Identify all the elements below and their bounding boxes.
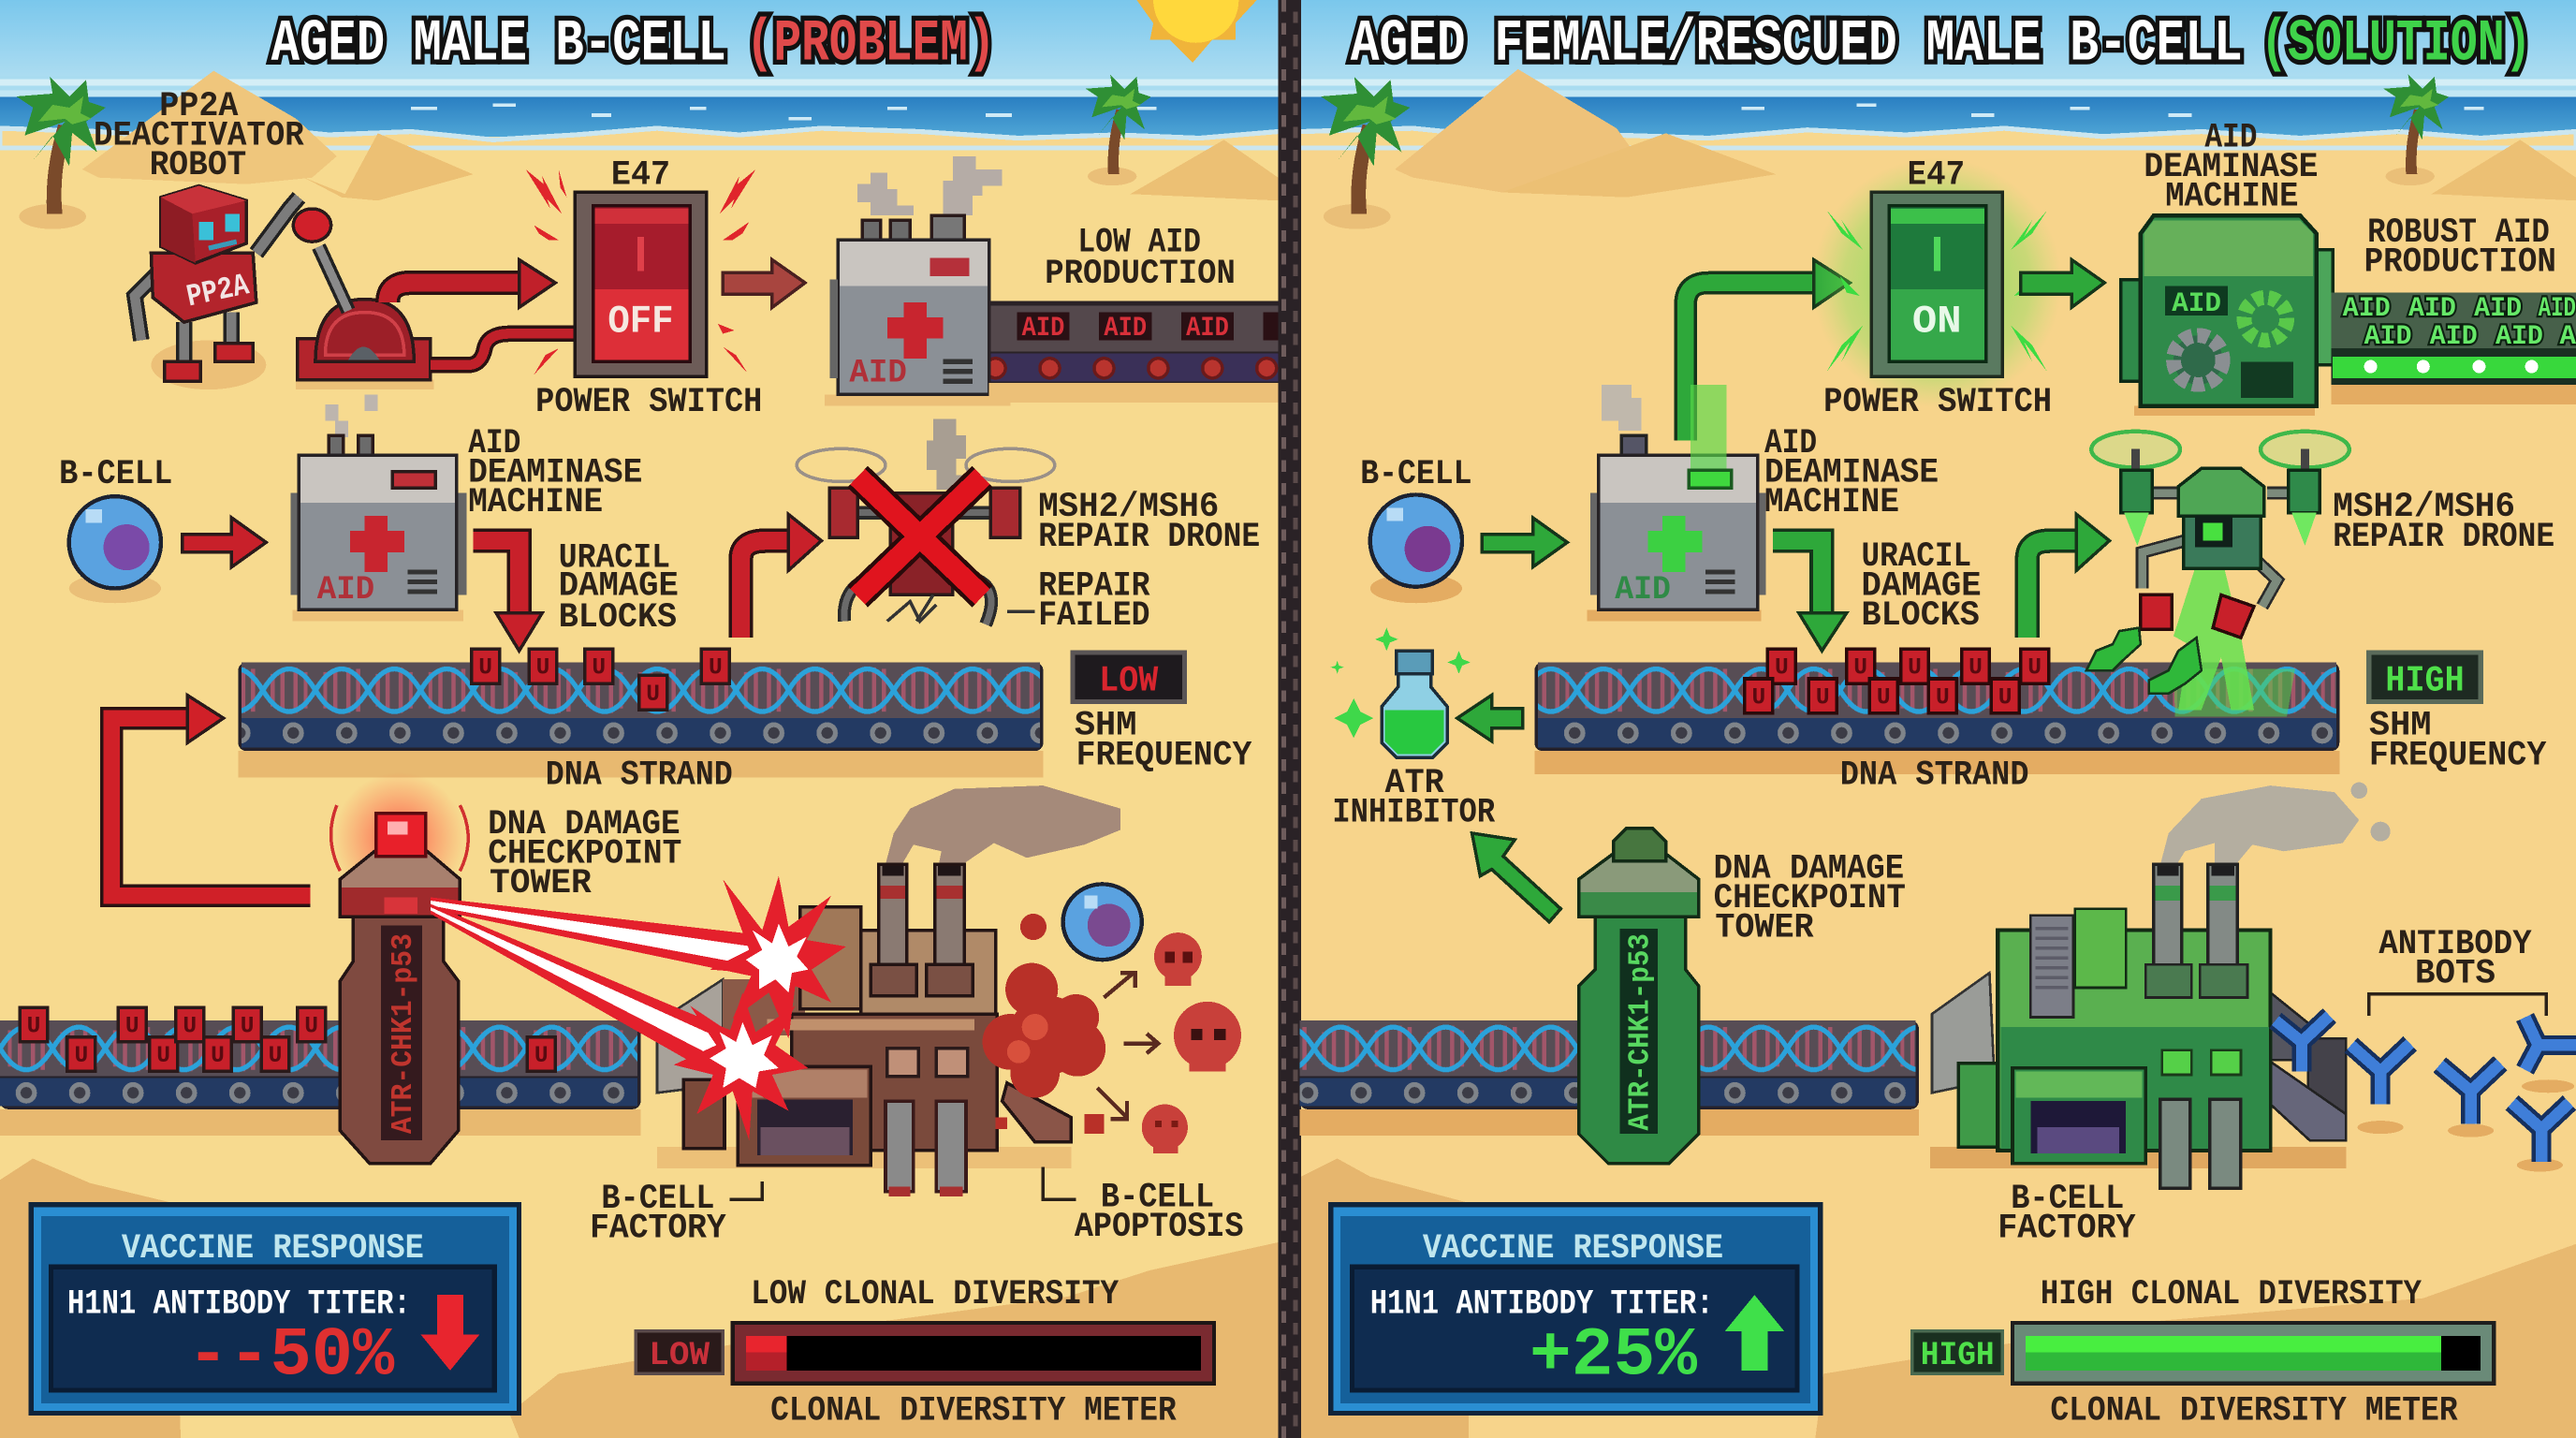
conveyor: DNA strand being repaired: U bbox=[1877, 685, 1891, 711]
icon: AID machine (low): AID bbox=[849, 354, 907, 391]
conveyor: DNA strand being repaired: U bbox=[1751, 685, 1765, 711]
label: DNA damage checkpoint tower: TOWER bbox=[1715, 909, 1814, 948]
label: B-cell apoptosis: B-CELL bbox=[1101, 1178, 1214, 1217]
label: B-cell factory: B-CELL bbox=[601, 1180, 714, 1219]
label: B-cell factory: FACTORY bbox=[1998, 1210, 2136, 1249]
label: AID deaminase machine: AID bbox=[468, 424, 520, 463]
label: clonal diversity meter: CLONAL DIVERSITY METER bbox=[770, 1392, 1177, 1431]
panel: vaccine response high bbox=[1331, 1205, 1821, 1414]
label: B-cell factory: FACTORY bbox=[590, 1210, 727, 1249]
label: low AID production: LOW AID bbox=[1077, 224, 1201, 263]
label: DNA damage checkpoint tower: CHECKPOINT bbox=[488, 835, 681, 874]
label: uracil damage blocks: DAMAGE bbox=[559, 566, 679, 606]
label: power switch: POWER SWITCH bbox=[1823, 383, 2052, 422]
label: low clonal diversity: LOW CLONAL DIVERSITY bbox=[751, 1275, 1120, 1314]
conveyor: DNA strand being repaired: U bbox=[1936, 685, 1950, 711]
label: MSH2/MSH6 repair drone: REPAIR DRONE bbox=[2333, 518, 2554, 557]
label: uracil damage blocks: URACIL bbox=[1862, 537, 1971, 577]
label: robust AID production: ROBUST AID bbox=[2367, 213, 2550, 253]
icon: AID machine active bbox=[1587, 385, 1766, 622]
label: PP2A deactivator robot: ROBOT bbox=[150, 146, 246, 185]
icon: PP2A robot: PP2A bbox=[183, 268, 252, 315]
icon: lever bbox=[293, 209, 433, 389]
arrow: switch to machine bbox=[2021, 259, 2104, 307]
title: solution: AGED FEMALE/RESCUED MALE B-CELL bbox=[1351, 9, 2243, 77]
conveyor: DNA strand being repaired: U bbox=[1998, 685, 2012, 711]
label: MSH2/MSH6 repair drone: REPAIR DRONE bbox=[1038, 518, 1260, 557]
icon: AID machine bbox=[291, 394, 466, 622]
icon: checkpoint tower green: ATR-CHK1-p53 bbox=[1624, 933, 1657, 1131]
icon: B-cell bbox=[69, 496, 161, 603]
icon: active repair drone bbox=[2086, 432, 2349, 710]
panel: vaccine response low: VACCINE RESPONSE bbox=[122, 1229, 424, 1269]
conveyor: DNA strand with few uracil blocks: U bbox=[592, 656, 606, 682]
conveyor: damaged DNA: U bbox=[304, 1014, 318, 1039]
arrow: DNA to drone bbox=[2027, 514, 2110, 638]
panel: vaccine response low bbox=[31, 1205, 520, 1414]
label: DNA damage checkpoint tower: DNA DAMAGE bbox=[1714, 849, 1904, 888]
arrow: machine to DNA bbox=[473, 541, 542, 651]
label: uracil damage blocks: URACIL bbox=[559, 539, 670, 579]
label: ATR inhibitor: ATR bbox=[1385, 764, 1445, 803]
icon: failed repair drone bbox=[797, 419, 1055, 624]
arrow: tower feedback to DNA bbox=[111, 696, 311, 896]
label: SHM frequency: FREQUENCY bbox=[2369, 736, 2547, 775]
panel: problem side bbox=[0, 87, 1278, 1431]
label: DNA damage checkpoint tower bbox=[488, 805, 681, 903]
conveyor: DNA strand with few uracil blocks: U bbox=[646, 682, 660, 708]
label: antibody bots: ANTIBODY bbox=[2378, 925, 2532, 964]
conveyor: robust AID output bbox=[2331, 292, 2576, 404]
icon: E47 switch on bbox=[1812, 158, 2062, 407]
icon: damaged B-cell factory bbox=[657, 785, 1120, 1196]
conveyor: low AID output: AID bbox=[1186, 312, 1229, 344]
conveyor: low AID output: AID bbox=[1104, 312, 1147, 344]
label: PP2A deactivator robot bbox=[94, 87, 305, 185]
badge: low SHM: LOW bbox=[1099, 660, 1159, 701]
label: SHM frequency: FREQUENCY bbox=[1076, 736, 1252, 775]
conveyor: robust AID output: AID bbox=[2430, 320, 2478, 352]
conveyor: robust AID output: AID bbox=[2343, 292, 2391, 324]
label: AID deaminase machine: AID bbox=[1764, 424, 1817, 463]
icon: AID machine active: AID bbox=[1615, 571, 1671, 609]
arrow: conveyor to ATR inhibitor bbox=[1457, 696, 1523, 741]
label: B-cell: B-CELL bbox=[1360, 455, 1472, 494]
label: B-cell apoptosis: APOPTOSIS bbox=[1075, 1208, 1244, 1247]
label: SHM frequency: SHM bbox=[2369, 707, 2432, 746]
icon: B-cell bbox=[1370, 494, 1462, 603]
conveyor: DNA strand with few uracil blocks bbox=[238, 649, 1043, 777]
arrow: lever to switch bbox=[388, 259, 575, 365]
icon: healthy B-cell factory bbox=[1930, 783, 2391, 1188]
icon: skulls bbox=[1097, 932, 1241, 1153]
label: MSH2/MSH6 repair drone bbox=[2333, 488, 2554, 557]
label: PP2A deactivator robot: PP2A bbox=[159, 87, 239, 126]
panel: vaccine response high: +25% bbox=[1530, 1317, 1698, 1395]
label: repair failed bbox=[1007, 566, 1150, 636]
label: DNA damage checkpoint tower: TOWER bbox=[490, 864, 593, 903]
label: robust AID production: PRODUCTION bbox=[2364, 243, 2556, 283]
icon: checkpoint tower red: ATR-CHK1-p53 bbox=[388, 933, 420, 1134]
label: low AID production: PRODUCTION bbox=[1045, 255, 1236, 294]
label: SHM frequency: SHM bbox=[1075, 707, 1137, 746]
arrow: machine to switch bbox=[1686, 259, 1850, 441]
label: AID deaminase machine bbox=[468, 424, 642, 522]
label: high clonal diversity: HIGH CLONAL DIVERSITY bbox=[2041, 1275, 2422, 1314]
badge: high SHM: HIGH bbox=[2385, 660, 2465, 701]
label: uracil damage blocks: DAMAGE bbox=[1862, 566, 1982, 606]
badge: low diversity: LOW bbox=[649, 1337, 710, 1374]
label: B-cell factory bbox=[590, 1180, 762, 1249]
conveyor: DNA strand being repaired: U bbox=[1853, 656, 1867, 682]
conveyor: damaged DNA: U bbox=[241, 1014, 255, 1039]
label: robust AID production bbox=[2364, 213, 2556, 283]
icon: checkpoint tower green bbox=[1579, 829, 1699, 1164]
conveyor: DNA strand being repaired: U bbox=[2027, 656, 2042, 682]
conveyor: repaired DNA bbox=[1299, 1020, 1919, 1136]
label: B-cell: B-CELL bbox=[59, 455, 172, 494]
label: uracil damage blocks: BLOCKS bbox=[559, 598, 677, 638]
label: B-cell factory bbox=[1998, 1180, 2136, 1249]
label: ATR inhibitor bbox=[1332, 764, 1496, 833]
palm trees bbox=[16, 75, 2449, 229]
conveyor: DNA strand being repaired: U bbox=[1775, 656, 1789, 682]
label: AID deaminase machine: MACHINE bbox=[1764, 483, 1899, 522]
icon: dying B-cell bbox=[1063, 884, 1142, 960]
arrow: tower to ATR inhibitor bbox=[1472, 833, 1560, 922]
label: antibody bots: BOTS bbox=[2415, 955, 2496, 994]
arrow: switch to machine bbox=[723, 259, 805, 307]
label: repair failed: REPAIR bbox=[1038, 566, 1150, 606]
conveyor: damaged DNA: U bbox=[125, 1014, 139, 1039]
label: antibody bots bbox=[2369, 925, 2546, 1016]
meter: clonal diversity low bbox=[733, 1323, 1214, 1384]
icon: AID machine: AID bbox=[317, 571, 374, 609]
panel: vaccine response low: --50% bbox=[187, 1317, 395, 1395]
label: uracil damage blocks bbox=[559, 539, 679, 638]
panel: vaccine response low: H1N1 ANTIBODY TITER: bbox=[67, 1284, 411, 1324]
label: B-cell apoptosis bbox=[1043, 1167, 1244, 1247]
label: ATR inhibitor: INHIBITOR bbox=[1332, 794, 1496, 833]
icon: apoptosis explosion bbox=[983, 914, 1105, 1134]
label: AID deaminase machine: DEAMINASE bbox=[1764, 453, 1939, 492]
label: AID deaminase machine: MACHINE bbox=[2165, 178, 2298, 217]
label: MSH2/MSH6 repair drone: MSH2/MSH6 bbox=[2333, 488, 2515, 527]
label: AID deaminase machine bbox=[2144, 118, 2318, 217]
conveyor: damaged DNA: U bbox=[27, 1014, 40, 1039]
arrow: machine to DNA bbox=[1773, 541, 1847, 651]
conveyor: damaged DNA: U bbox=[534, 1044, 549, 1069]
icon: antibody bots bbox=[2276, 1016, 2576, 1172]
label: uracil damage blocks bbox=[1862, 537, 1982, 636]
arrow: B-cell to machine bbox=[183, 518, 266, 567]
label: AID deaminase machine bbox=[1764, 424, 1939, 522]
conveyor: damaged DNA: U bbox=[269, 1044, 282, 1069]
label: SHM frequency bbox=[1075, 707, 1252, 775]
icon: ATR inhibitor vial bbox=[1331, 628, 1471, 757]
label: MSH2/MSH6 repair drone: MSH2/MSH6 bbox=[1038, 488, 1219, 527]
conveyor: DNA strand being repaired: U bbox=[1969, 656, 1983, 682]
label: AID deaminase machine: AID bbox=[2204, 118, 2258, 157]
badge: high SHM bbox=[2369, 653, 2481, 702]
conveyor: robust AID output: AID bbox=[2474, 292, 2522, 324]
icon: checkpoint tower red bbox=[331, 772, 468, 1164]
icon: E47 switch off: OFF bbox=[607, 300, 674, 345]
label: low AID production bbox=[1045, 224, 1236, 294]
conveyor: DNA strand with few uracil blocks: U bbox=[478, 656, 492, 682]
label: power switch: POWER SWITCH bbox=[535, 383, 762, 422]
icon: robust AID machine bbox=[2121, 215, 2333, 416]
label: AID deaminase machine: DEAMINASE bbox=[468, 453, 642, 492]
conveyor: DNA strand being repaired: U bbox=[1908, 656, 1922, 682]
icon: robust AID machine: AID bbox=[2172, 287, 2221, 319]
conveyor: damaged DNA: U bbox=[75, 1044, 88, 1069]
title: problem: AGED MALE B-CELL bbox=[271, 9, 726, 77]
label: B-cell factory: B-CELL bbox=[2011, 1180, 2124, 1219]
label: uracil damage blocks: BLOCKS bbox=[1862, 596, 1980, 636]
label: DNA damage checkpoint tower: CHECKPOINT bbox=[1714, 879, 1906, 918]
conveyor: low AID output: AID bbox=[1022, 312, 1064, 344]
panel: vaccine response high: H1N1 ANTIBODY TITER: bbox=[1370, 1284, 1714, 1324]
conveyor: low AID output bbox=[989, 301, 1278, 403]
label: repair failed: FAILED bbox=[1038, 596, 1150, 636]
divider bbox=[1278, 0, 1301, 1438]
conveyor: DNA strand with few uracil blocks: U bbox=[536, 656, 549, 682]
conveyor: robust AID output: AID bbox=[2496, 320, 2543, 352]
meter: clonal diversity high bbox=[2012, 1323, 2494, 1384]
label: E47: E47 bbox=[1908, 156, 1965, 196]
lasers from tower to factory bbox=[431, 876, 846, 1140]
icon: E47 switch off bbox=[526, 169, 755, 376]
badge: low SHM bbox=[1073, 653, 1184, 702]
panel: solution side bbox=[1299, 118, 2576, 1431]
label: clonal diversity meter: CLONAL DIVERSITY METER bbox=[2050, 1392, 2458, 1431]
arrow: B-cell to machine bbox=[1482, 518, 1567, 567]
label: PP2A deactivator robot: DEACTIVATOR bbox=[94, 117, 305, 156]
label: SHM frequency bbox=[2369, 707, 2547, 775]
conveyor: robust AID output: AID bbox=[2364, 320, 2411, 352]
label: DNA damage checkpoint tower bbox=[1714, 849, 1906, 948]
panel: vaccine response high: VACCINE RESPONSE bbox=[1423, 1229, 1723, 1269]
conveyor: damaged DNA: U bbox=[183, 1014, 197, 1039]
conveyor: damaged DNA: U bbox=[211, 1044, 225, 1069]
sun bbox=[1137, 0, 1257, 63]
icon: E47 switch on: ON bbox=[1912, 300, 1962, 345]
conveyor: DNA strand being repaired bbox=[1534, 649, 2339, 774]
conveyor: damaged DNA: U bbox=[156, 1044, 170, 1069]
label: AID deaminase machine: MACHINE bbox=[468, 483, 603, 522]
label: DNA damage checkpoint tower: DNA DAMAGE bbox=[488, 805, 681, 844]
conveyor: robust AID output: AID bbox=[2408, 292, 2456, 324]
conveyor: robust AID output: A bbox=[2559, 320, 2576, 352]
label: MSH2/MSH6 repair drone bbox=[1038, 488, 1260, 557]
label: AID deaminase machine: DEAMINASE bbox=[2144, 148, 2318, 187]
arrow: DNA to drone bbox=[741, 514, 822, 638]
badge: high diversity: HIGH bbox=[1921, 1337, 1995, 1374]
conveyor: DNA strand being repaired: U bbox=[1816, 685, 1830, 711]
title: problem: (PROBLEM) bbox=[746, 9, 996, 77]
conveyor: damaged DNA bbox=[0, 1007, 640, 1136]
badge: low diversity bbox=[636, 1331, 723, 1374]
label: E47: E47 bbox=[611, 156, 670, 196]
icon: PP2A robot bbox=[135, 185, 299, 389]
label: DNA strand: DNA STRAND bbox=[546, 756, 733, 795]
conveyor: DNA strand with few uracil blocks: U bbox=[709, 656, 723, 682]
label: DNA strand: DNA STRAND bbox=[1840, 756, 2029, 795]
icon: AID machine (low) bbox=[825, 156, 1010, 406]
